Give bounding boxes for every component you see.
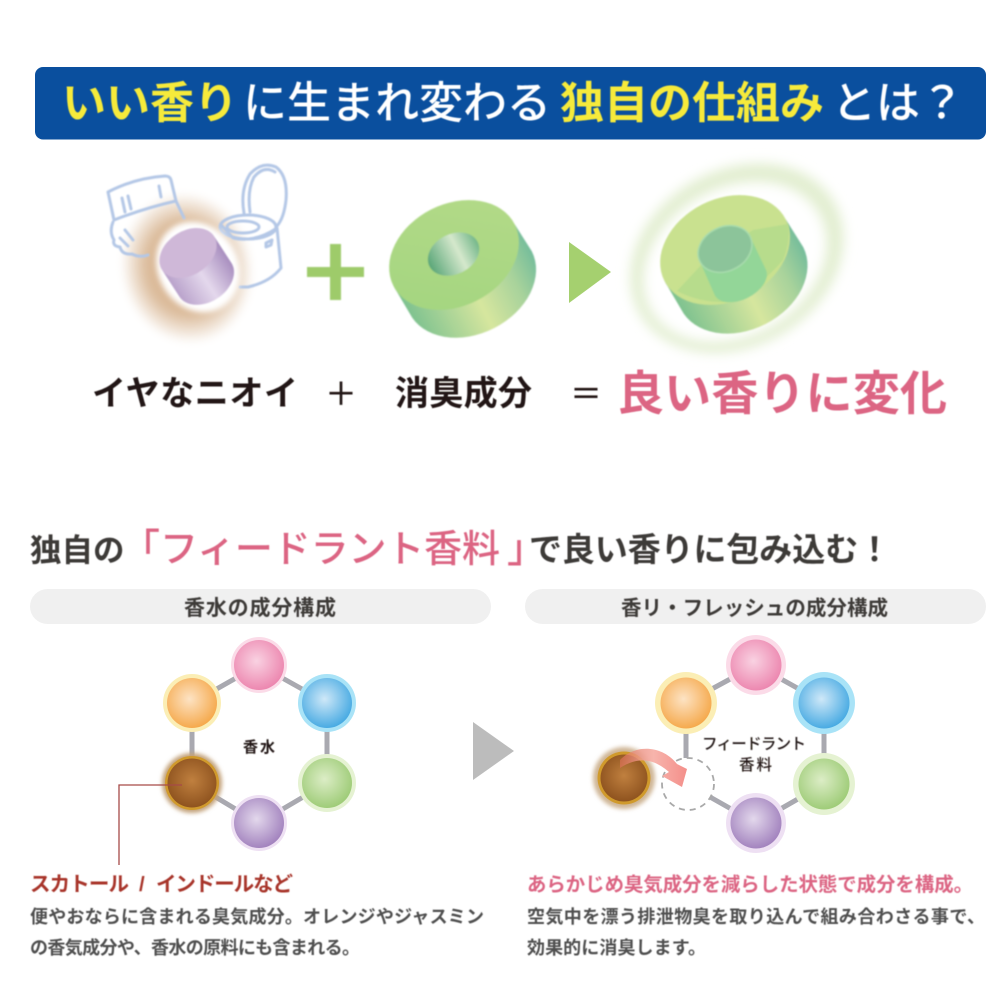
callout line	[119, 785, 182, 865]
icon: purple odor cylinder	[150, 218, 243, 315]
section heading: 」	[507, 528, 546, 571]
plus sign: ＋	[325, 376, 357, 412]
sphere: purple	[726, 793, 786, 853]
dashed empty slot	[662, 758, 714, 810]
sphere: purple	[231, 795, 287, 851]
callout heading: スカトール	[30, 873, 129, 896]
hexagon connectors	[192, 665, 327, 823]
sphere: orange	[163, 674, 221, 732]
icon: glowing ring	[596, 126, 878, 390]
center label: Fedorant fragrance: フィードラント	[702, 736, 806, 753]
section heading: で良い香りに包み込む！	[529, 531, 891, 568]
sphere: pink	[231, 637, 287, 693]
icon: green plus	[307, 244, 364, 300]
left pill text: 香水の成分構成	[184, 596, 336, 620]
label: bad smell: イヤなニオイ	[92, 375, 298, 413]
sphere: green	[793, 753, 855, 815]
right pill text: 香リ・フレッシュの成分構成	[621, 596, 888, 620]
ring hole	[420, 224, 487, 284]
icon: bad odor with diaper and toilet	[107, 165, 286, 356]
title text: いい香り	[62, 79, 238, 128]
ring body	[641, 172, 827, 356]
callout heading: インドールなど	[156, 873, 294, 896]
sphere: blue	[793, 672, 855, 734]
icon: toilet	[220, 165, 286, 287]
explanation body: 効果的に消臭します。	[527, 938, 706, 958]
right pill header	[525, 589, 986, 624]
sphere: removed brown	[593, 747, 655, 809]
sphere: orange	[655, 672, 717, 734]
callout body	[30, 906, 484, 958]
title text: とは？	[832, 79, 964, 128]
label: deodorant component: 消臭成分	[395, 375, 532, 413]
explanation body	[527, 906, 985, 958]
sphere: pink	[726, 635, 786, 695]
sphere: green	[298, 754, 356, 812]
panel: perfume composition	[30, 589, 491, 958]
callout heading	[30, 873, 294, 896]
left pill header	[30, 589, 491, 624]
hexagon connectors	[686, 665, 824, 823]
sphere: brown	[162, 753, 222, 813]
title text: 独自の仕組み	[560, 79, 824, 128]
title text: に生まれ変わる	[243, 79, 551, 128]
center label: Fedorant fragrance	[702, 736, 806, 774]
equals sign: ＝	[570, 376, 602, 412]
section heading: 独自の	[30, 532, 125, 568]
label: changes to good scent: 良い香りに変化	[617, 367, 947, 420]
center label: perfume: 香水	[243, 738, 275, 756]
sphere: blue	[298, 674, 356, 732]
icon: deodorant ring	[370, 177, 555, 360]
inner cylinder	[688, 217, 774, 311]
panel: Kaori Fresh composition	[525, 589, 986, 958]
explanation heading: あらかじめ臭気成分を減らした状態で成分を構成。	[527, 873, 973, 896]
callout heading: /	[139, 873, 145, 896]
callout body: の香気成分や、香水の原料にも含まれる。	[30, 937, 360, 958]
arrow: result triangle	[569, 242, 611, 303]
icon: diaper	[108, 176, 184, 256]
explanation body: 空気中を漂う排泄物臭を取り込んで組み合わさる事で、	[527, 906, 985, 927]
callout body: 便やおならに含まれる臭気成分。オレンジやジャスミン	[30, 906, 484, 927]
section heading: フィードラント香料	[160, 529, 500, 571]
ring cut wedge	[677, 224, 789, 302]
arrow: pink curved	[620, 749, 687, 787]
equation labels	[92, 375, 602, 413]
arrow: grey triangle	[473, 722, 514, 780]
section heading: 「	[121, 528, 160, 571]
center label: Fedorant fragrance: 香料	[739, 756, 772, 774]
section heading	[30, 528, 891, 571]
title banner	[35, 67, 986, 140]
